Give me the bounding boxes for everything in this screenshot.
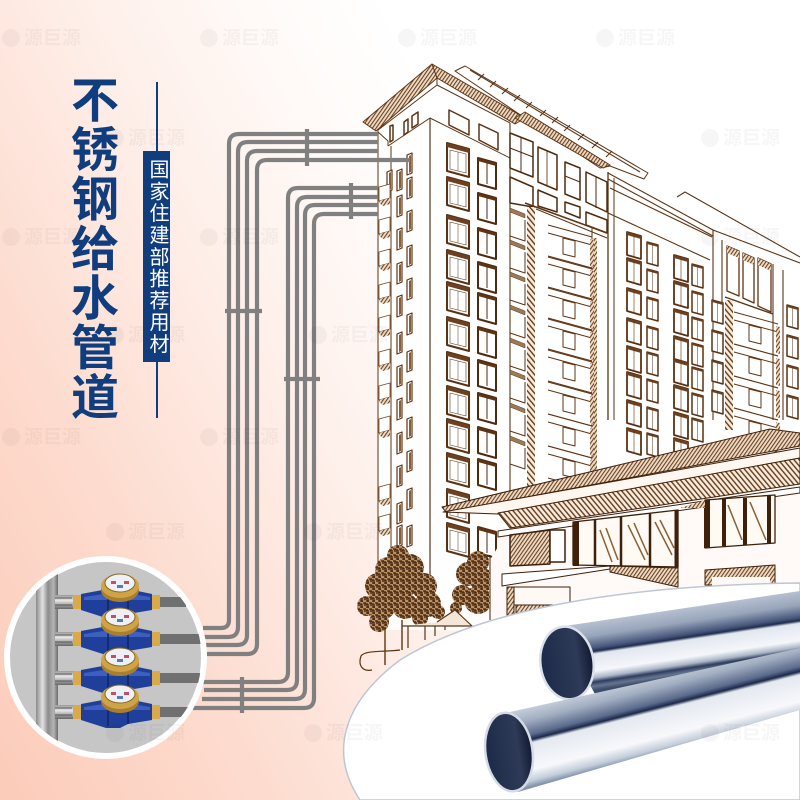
roof cornice <box>363 64 648 600</box>
pipes: upper bundle <box>203 129 410 654</box>
watermark row 3: 源巨源 <box>222 426 279 448</box>
trees <box>357 545 494 665</box>
watermark row 3: 源巨源 <box>331 324 388 346</box>
front face window columns <box>447 143 496 558</box>
watermark row 1: 源巨源 <box>24 27 81 49</box>
pavilion roof <box>442 429 800 537</box>
meter row 1 <box>55 574 160 618</box>
watermark row 2 <box>2 127 780 248</box>
grey outlet pipes <box>160 597 201 717</box>
watermark row 1: 源巨源 <box>222 27 279 49</box>
white panel behind stainless tubes <box>344 583 800 800</box>
watermark row 1: 源巨源 <box>420 27 477 49</box>
far right block windows <box>712 246 798 452</box>
right block windows <box>627 232 703 465</box>
small kiosk and hedge <box>360 610 472 670</box>
watermark row 3 <box>2 324 388 448</box>
pavilion canopy <box>490 555 678 620</box>
watermark row 3: 源巨源 <box>24 426 81 448</box>
watermark row 4: 源巨源 <box>128 521 185 543</box>
title: 不锈钢给水管道 <box>63 75 116 422</box>
clamp <box>307 129 351 219</box>
watermark row 4: 源巨源 <box>326 722 383 744</box>
projecting centre block <box>510 172 614 490</box>
watermark row 2: 源巨源 <box>723 127 780 149</box>
meter row 2 <box>55 608 160 655</box>
stainless tube: upper <box>536 591 800 703</box>
watermark row 2: 源巨源 <box>24 226 81 248</box>
building sketch <box>357 64 800 670</box>
left face balconies and windows <box>379 153 412 547</box>
clamp <box>242 379 320 713</box>
meter row 3 <box>55 648 160 694</box>
top attic windows <box>390 110 498 150</box>
watermark row 2: 源巨源 <box>128 127 185 149</box>
building white silhouette <box>378 66 800 630</box>
circular inset: water meters <box>7 559 204 756</box>
pipes: lower bundle <box>193 188 378 713</box>
watermark row 3: 源巨源 <box>128 324 185 346</box>
watermark row 2: 源巨源 <box>222 226 279 248</box>
meters and riser pipe <box>36 574 200 741</box>
watermark row 4: 源巨源 <box>128 722 185 744</box>
watermark row 1: 源巨源 <box>618 27 675 49</box>
stainless tube: lower <box>480 648 800 794</box>
watermark row 4: 源巨源 <box>326 521 383 543</box>
pavilion walls <box>490 490 800 620</box>
watermark row 1 <box>2 27 675 49</box>
inset disc <box>7 559 204 756</box>
badge: recommended material: 国家住建部推荐用材 <box>146 159 168 355</box>
upper glazing of centre block <box>510 133 607 233</box>
meter row 4 <box>55 685 160 728</box>
watermark row 4 <box>106 521 780 744</box>
right block outline <box>608 173 800 420</box>
watermark row 4: 源巨源 <box>723 722 780 744</box>
riser pipe <box>36 574 58 741</box>
watermark row 2: 源巨源 <box>723 226 780 248</box>
pavilion glass front <box>510 495 775 590</box>
vertical rule <box>156 82 158 418</box>
